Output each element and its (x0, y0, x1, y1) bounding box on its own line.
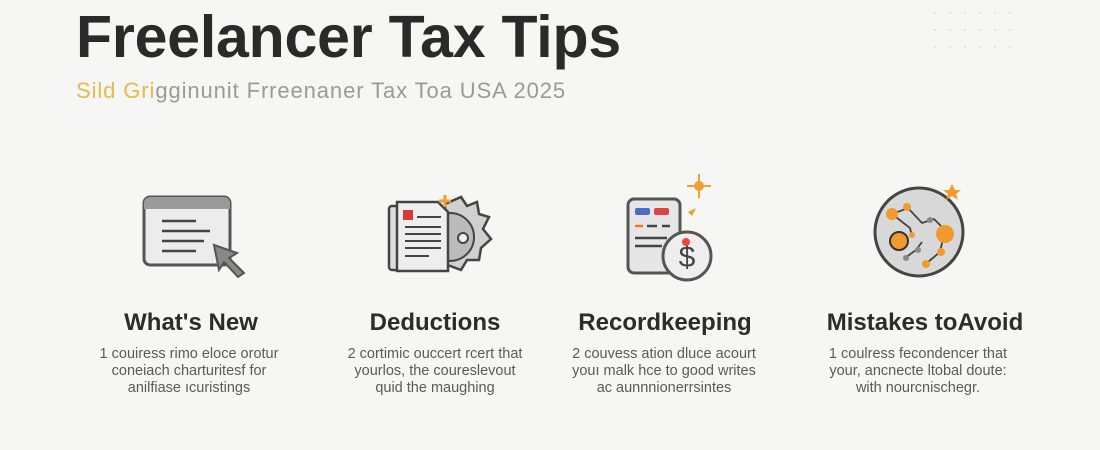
column 4 text: 1 coulress fecondencer that (829, 346, 1007, 362)
icon: document with disc (388, 195, 493, 272)
column 2 heading: Deductions (370, 309, 500, 336)
column 2 text: 2 cortimic ouccert rcert that (348, 346, 522, 362)
column 4 text (829, 346, 1007, 396)
column 3 text: ac aunnnionerrsintes (597, 380, 731, 396)
column 4 heading: Mistakes toAvoid (827, 309, 1023, 336)
decorative dot grid (934, 12, 1011, 48)
column 3 text: youı malk hce to good writes (572, 363, 756, 379)
column 2 text: yourlos, the coureslevout (354, 363, 516, 379)
column 3 heading: Recordkeeping (578, 309, 752, 336)
icon: ledger with dollar coin: $ (679, 241, 696, 274)
column 1 text: coneiach charturitesf for (112, 363, 266, 379)
column 1 text: 1 couiress rimo eloce orotur (100, 346, 278, 362)
column 1 text (100, 346, 278, 396)
icon: network circle (874, 184, 964, 278)
column 2 text (348, 346, 522, 396)
column 1 heading: What's New (124, 309, 258, 336)
column 2 text: quid the maughing (375, 380, 495, 396)
column 3 text: 2 couvess ation dluce acourt (572, 346, 756, 362)
column 1 text: anilfiase ıcuristings (128, 380, 250, 396)
subtitle: Sild Grigginunit Frreenaner Tax Toa USA 2025 (76, 78, 566, 103)
icon: browser window with cursor (142, 196, 246, 278)
icon: ledger with dollar coin (626, 174, 712, 282)
title: Freelancer Tax Tips (76, 4, 621, 70)
column 4 text: with nourcnischegr. (856, 380, 980, 396)
column 3 text (572, 346, 756, 396)
column 4 text: your, ancnecte ltobal doute: (829, 363, 1007, 379)
